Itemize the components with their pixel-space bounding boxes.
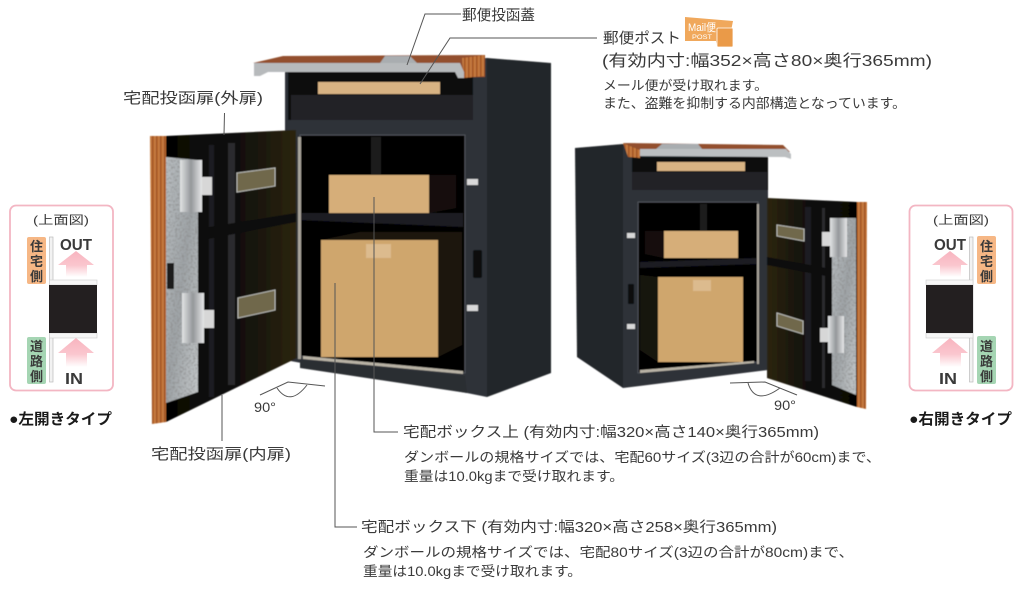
- lid centre plate: [656, 144, 703, 150]
- tag: road side: 路: [30, 354, 43, 369]
- lower parcel: [321, 240, 438, 357]
- tag: house side: [27, 237, 46, 284]
- angle mark right: [730, 382, 797, 413]
- tag: house side: 側: [30, 269, 43, 284]
- label: inner door: 宅配投函扉(内扉): [151, 446, 291, 463]
- lower parcel tape: [366, 244, 391, 258]
- arrow: in: [58, 338, 94, 367]
- parcel in mail compartment: [657, 162, 745, 171]
- door mail window top: [237, 168, 275, 192]
- caption: left-hinged type: ●左開きタイプ: [9, 411, 112, 428]
- arrow: in: [932, 338, 968, 367]
- shelf: [640, 258, 758, 268]
- tag: house side: 住: [980, 239, 993, 254]
- lid wood end: [623, 143, 640, 158]
- label: mail post block: (有効内寸:幅352×高さ80×奥行365mm): [602, 52, 932, 70]
- tag: road side: 道: [30, 339, 43, 354]
- angle mark right: 90°: [774, 397, 796, 413]
- leader lines: [222, 14, 597, 527]
- door silver plate: [832, 218, 856, 395]
- tag: house side: [977, 236, 996, 284]
- arrow: out: [58, 251, 94, 277]
- lower parcel: [658, 277, 743, 362]
- tag: road side: 路: [980, 354, 993, 369]
- panel caption: (上面図): [33, 213, 89, 227]
- door vertical bars: [805, 207, 811, 381]
- mail compartment lip: [291, 95, 473, 120]
- door latch top: [830, 218, 847, 257]
- text block: lower box: 重量は10.0kgまで受け取れます。: [363, 564, 582, 579]
- arrow: out: [932, 251, 968, 277]
- box front frame: [285, 58, 487, 397]
- lower parcel side: [640, 275, 658, 362]
- bottom rail: [303, 356, 463, 374]
- tag: house side: 宅: [980, 254, 993, 269]
- bottom rail: [640, 361, 754, 373]
- parcel in mail compartment: [318, 82, 440, 94]
- right opening parcel box: [575, 143, 867, 409]
- left opening parcel box: [150, 55, 551, 424]
- lid silver strip: [640, 149, 791, 159]
- panel frame: [910, 206, 1012, 390]
- lid silver strip: [254, 63, 464, 78]
- tag: road side: [977, 336, 996, 384]
- box side panel: [575, 144, 623, 388]
- shelf: [300, 213, 463, 227]
- lid wood end: [462, 55, 485, 78]
- door latch top: [180, 160, 202, 212]
- tag: house side: 宅: [30, 254, 43, 269]
- left door inner: [166, 130, 297, 422]
- upper parcel side: [429, 175, 456, 213]
- door hinge strip: [298, 137, 301, 359]
- handle slots on frame: [467, 179, 478, 185]
- box plan: [49, 280, 97, 338]
- tag: road side: 側: [980, 369, 993, 384]
- back post: [700, 204, 707, 232]
- text block: upper box: 宅配ボックス上 (有効内寸:幅320×高さ140×奥行365mm): [403, 424, 819, 441]
- door vertical bars: [209, 145, 214, 397]
- tag: house side: 側: [980, 269, 993, 284]
- door silver plate: [166, 157, 198, 403]
- panel: right-hinged top view: [910, 206, 1012, 390]
- door latch bottom: [182, 293, 204, 343]
- icon: Mail POST logo: Mail便: [688, 21, 716, 34]
- door latch bottom: [828, 316, 844, 353]
- upper parcel: [329, 175, 429, 213]
- OUT label: OUT: [60, 237, 92, 254]
- door wood edge: [857, 202, 867, 409]
- mail compartment opening: [632, 157, 768, 190]
- door wood edge: [150, 136, 166, 424]
- text block: lower box: 宅配ボックス下 (有効内寸:幅320×高さ258×奥行365mm): [361, 519, 777, 536]
- mail compartment opening: [288, 72, 473, 120]
- panel: left-hinged top view: [10, 206, 113, 390]
- label: mail post block: メール便が受け取れます。: [603, 78, 768, 93]
- tag: road side: 側: [30, 369, 43, 384]
- box interior: [300, 135, 465, 373]
- text block: lower box: ダンボールの規格サイズでは、宅配80サイズ(3辺の合計が80cm)まで、: [363, 545, 854, 560]
- tag: road side: 道: [980, 339, 993, 354]
- mail compartment lip: [632, 172, 767, 190]
- upper parcel: [664, 231, 738, 258]
- lid wood top: [623, 143, 790, 152]
- caption: right-hinged type: ●右開きタイプ: [909, 411, 1012, 428]
- label: mail lid: 郵便投函蓋: [462, 7, 535, 24]
- angle mark left: [254, 382, 325, 415]
- label: mail post block: [602, 30, 932, 111]
- door horizontal bar: [203, 213, 296, 240]
- panel caption: (上面図): [933, 213, 989, 227]
- handle slots on frame: [627, 233, 635, 238]
- text block: lower box: [361, 519, 854, 579]
- upper parcel side: [645, 231, 664, 258]
- lid wood top: [253, 55, 485, 77]
- plate dark notch: [167, 263, 174, 289]
- back post: [371, 137, 381, 177]
- text block: upper box: 重量は10.0kgまで受け取れます。: [404, 469, 624, 484]
- label: outer door: 宅配投函扉(外扉): [123, 90, 263, 107]
- right door inner: [767, 198, 857, 407]
- door mail window bottom: [777, 313, 803, 334]
- icon: Mail POST logo: [685, 17, 733, 47]
- IN label: IN: [939, 371, 957, 388]
- tag: house side: 住: [30, 239, 43, 254]
- lid centre plate: [380, 56, 417, 63]
- box interior: [638, 202, 758, 373]
- text block: upper box: [403, 424, 881, 484]
- panel frame: [10, 206, 113, 390]
- lower parcel tape: [693, 280, 711, 291]
- box plan: [926, 280, 973, 338]
- icon: Mail POST logo: POST: [692, 34, 712, 41]
- text block: upper box: ダンボールの規格サイズでは、宅配60サイズ(3辺の合計が60cm)まで、: [404, 450, 881, 465]
- door strip: [970, 237, 973, 382]
- label: mail post block: また、盗難を抑制する内部構造となっています。: [603, 96, 906, 111]
- label: mail post block: 郵便ポスト: [603, 30, 681, 47]
- tag: road side: [27, 337, 46, 384]
- door strip: [50, 237, 53, 382]
- OUT label: OUT: [934, 237, 966, 254]
- door hinge strip: [757, 204, 759, 364]
- door horizontal bar: [767, 257, 826, 276]
- angle mark left: 90°: [254, 399, 276, 415]
- door mail window top: [777, 225, 804, 241]
- lower parcel top and side: [321, 232, 462, 357]
- box front frame: [623, 144, 768, 388]
- IN label: IN: [65, 371, 83, 388]
- box side panel: [487, 58, 551, 397]
- door mail window bottom: [238, 290, 275, 318]
